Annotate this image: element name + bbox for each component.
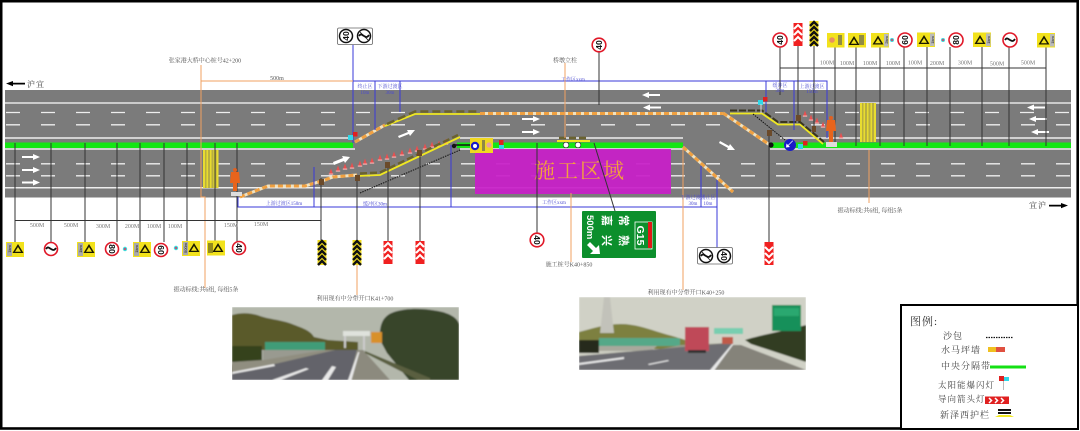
cones taper	[329, 110, 843, 175]
blue zone labels: 缓冲区	[772, 82, 788, 89]
legend: water barrier: 水马坪墙	[941, 344, 981, 355]
blue zone labels	[266, 76, 825, 208]
distance labels bottom: 300M	[96, 224, 111, 230]
distance labels bottom: 100M	[147, 224, 162, 230]
annotation labels: 500m	[270, 76, 284, 82]
worker left	[230, 168, 242, 196]
legend: solar flash lamp	[938, 376, 1009, 390]
legend: median	[941, 360, 1026, 371]
blue zone labels: 30m	[386, 91, 395, 96]
bottom left signs: 60	[156, 245, 166, 255]
speed sign 40 top center	[592, 38, 606, 52]
direction label right	[1029, 200, 1068, 210]
blue zone labels: 150m	[806, 90, 818, 95]
distance labels bottom	[30, 222, 269, 230]
top right signs: 40	[775, 35, 785, 45]
legend panel	[901, 305, 1078, 429]
distance labels top: 100M	[908, 60, 923, 66]
top right signs: 1km	[986, 36, 991, 44]
distance labels bottom: 500M	[64, 223, 79, 229]
bottom left signs: 80	[107, 244, 117, 254]
legend: sandbag	[943, 330, 1013, 341]
top right signs: 2km	[884, 36, 889, 44]
top right signs: 60	[900, 35, 910, 45]
orange leader lines	[201, 63, 869, 295]
direction label left: 沪宜	[27, 79, 45, 89]
blue zone labels: 10m	[361, 91, 370, 96]
top right signs: 1km	[1050, 36, 1055, 44]
blue zone labels: 工作区xxm	[542, 199, 566, 206]
legend: solar flash lamp: 太阳能爆闪灯	[938, 380, 995, 390]
blue zone labels: 10m	[704, 202, 713, 207]
bottom left signs: 1km	[134, 245, 139, 253]
annotation labels: 施工桩号K40+850	[546, 260, 592, 268]
lamp on left median	[348, 132, 358, 140]
blue zone labels: 30m	[776, 89, 785, 94]
worker right	[826, 116, 837, 147]
distance labels bottom: 500M	[30, 223, 45, 229]
blue zone labels: 工作区xxm	[561, 76, 585, 83]
distance labels top: 200M	[930, 61, 945, 67]
blue zone labels: 30m	[689, 202, 698, 207]
distance labels top: 100M	[840, 61, 855, 67]
blue zone labels: 上游过渡区	[799, 83, 825, 90]
distance labels top: 100M	[886, 61, 901, 67]
bottom left signs: 1km	[78, 245, 83, 253]
green guide sign: 常熟	[617, 215, 631, 255]
legend title: 图例:	[910, 314, 938, 328]
traffic arrows	[22, 92, 1049, 186]
distance labels bottom: 150M	[224, 223, 239, 229]
median devices center	[452, 138, 581, 153]
blue zone labels: 终止区	[357, 83, 373, 90]
distance labels top: 500M	[990, 62, 1005, 68]
distance labels top: 500M	[1021, 60, 1036, 66]
green guide sign: 嘉兴	[600, 215, 614, 255]
photo: median opening K41+700	[230, 307, 459, 380]
orange water barriers	[240, 113, 770, 197]
top right signs: 80	[951, 35, 961, 45]
blue zone labels: 缓冲区30m	[363, 200, 387, 208]
speed sign 40 top center: 40	[594, 40, 604, 50]
photo: median opening K40+250	[579, 297, 806, 370]
road surface	[5, 90, 1071, 198]
blue zone labels: 下游过渡区	[680, 194, 706, 201]
rumble strips left	[203, 150, 218, 188]
legend: arrow light: 导向箭头灯	[938, 394, 986, 404]
top right signs	[773, 21, 1055, 48]
annotation labels: 振动标线:共6组, 每组5条	[838, 206, 902, 214]
construction zone	[475, 149, 671, 194]
legend: arrow light	[938, 394, 1009, 404]
annotation labels: 利用现有中分带开口K41+700	[317, 294, 393, 302]
rumble strips right	[860, 103, 876, 142]
annotation labels	[169, 56, 902, 302]
speed sign 40 bottom: 40	[532, 235, 542, 245]
top center prohibition sign: 40	[341, 31, 351, 41]
distance labels bottom: 200M	[125, 224, 140, 230]
blue dimension lines	[238, 45, 827, 248]
distance labels top	[820, 60, 1036, 68]
blue zone labels: 下游过渡区	[377, 83, 403, 90]
new jersey guardrails	[357, 110, 824, 176]
top center prohibition sign	[338, 28, 372, 44]
bottom chevrons	[318, 240, 774, 265]
bottom left signs: 500m	[183, 242, 188, 253]
direction label right: 宜沪	[1029, 200, 1047, 210]
green guide sign: G15	[634, 226, 646, 246]
legend: sandbag: 沙包	[943, 330, 963, 341]
distance labels top: 300M	[958, 60, 973, 66]
distance labels top: 100M	[863, 61, 878, 67]
distance labels bottom: 100M	[168, 224, 183, 230]
annotation labels: 利用现有中分带开口K40+250	[648, 288, 724, 296]
distance labels top: 100M	[820, 60, 835, 66]
legend: water barrier	[941, 344, 1005, 355]
bottom right prohibition sign	[698, 248, 732, 264]
top right signs: 1km	[930, 36, 935, 44]
annotation labels: 振动标线:共6组, 每组5条	[174, 286, 238, 294]
green guide sign	[582, 211, 656, 258]
speed sign 40 bottom	[530, 233, 544, 247]
direction label left	[6, 79, 45, 89]
bottom left signs	[6, 240, 246, 257]
sandbags	[360, 114, 785, 193]
annotation labels: 桥墩立柱	[553, 56, 577, 64]
green guide sign: 500m	[584, 215, 595, 239]
median devices right	[758, 97, 808, 151]
central median	[5, 142, 1071, 149]
legend: median: 中央分隔带	[941, 360, 991, 371]
sign posts	[15, 46, 1046, 242]
construction zone: 施工区域	[534, 159, 626, 183]
bottom right prohibition sign: 40	[719, 251, 729, 261]
bottom left signs: 1km	[7, 245, 12, 253]
legend: new jersey guardrail	[940, 409, 1014, 420]
bottom left signs: 40	[234, 243, 244, 253]
blue zone labels: 终止区	[700, 194, 716, 201]
annotation labels: 张家港大桥中心桩号42+200	[169, 56, 241, 64]
distance labels bottom: 150M	[254, 222, 269, 228]
legend: new jersey guardrail: 新泽西护栏	[940, 409, 990, 420]
blue zone labels: 上游过渡区150m	[266, 200, 302, 207]
arrow-light bases on road	[319, 115, 816, 185]
